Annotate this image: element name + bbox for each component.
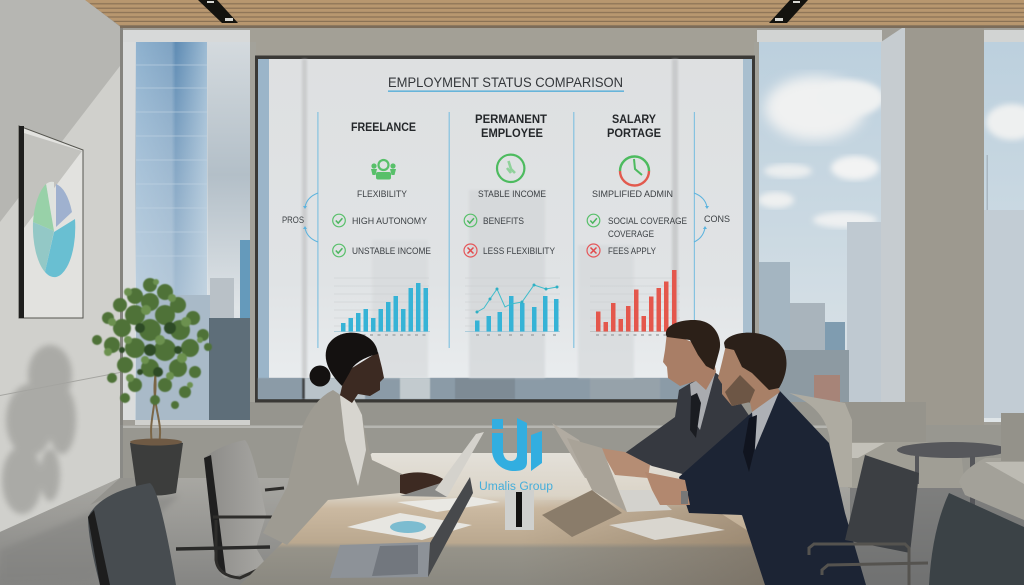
person: middle man	[600, 320, 750, 478]
foliage	[92, 278, 212, 409]
side table	[897, 442, 1007, 516]
sofa back	[848, 402, 926, 444]
bar chart: freelance	[334, 278, 430, 335]
document with pie chart	[347, 513, 472, 540]
wall around the screen	[250, 28, 757, 58]
icon: simplified admin clock	[620, 156, 649, 186]
hair	[724, 333, 787, 390]
logo mark	[492, 418, 542, 471]
face	[718, 345, 780, 412]
ceiling	[85, 0, 1024, 28]
right sofa	[959, 458, 1024, 520]
lower wall band	[90, 402, 1024, 520]
item: social coverage	[587, 214, 687, 239]
pros label with arrows	[282, 193, 318, 242]
right window view	[757, 42, 884, 422]
back chair	[204, 440, 290, 578]
heading: salary portage: SALARY	[612, 112, 656, 126]
right pillar	[881, 26, 984, 428]
shirt and tie	[752, 390, 780, 450]
screen lower city	[258, 378, 752, 399]
left wall	[0, 0, 135, 532]
sofa arm	[789, 393, 852, 487]
hair	[666, 320, 720, 370]
item: fees apply	[587, 244, 656, 257]
jacket	[625, 370, 750, 476]
middle chair	[809, 455, 919, 585]
person: front man	[645, 333, 866, 585]
front laptop keyboard	[619, 490, 672, 512]
label: stable income: STABLE INCOME	[478, 189, 546, 199]
beard shade	[725, 375, 755, 406]
item: high autonomy: HIGH AUTONOMY	[352, 216, 427, 226]
lounge furniture	[789, 393, 1024, 520]
upper window reveal	[123, 30, 1024, 42]
potted plant	[92, 278, 212, 496]
floor	[0, 478, 1024, 585]
hands	[645, 472, 690, 505]
table shadow	[542, 490, 622, 537]
document behind	[397, 497, 500, 512]
right chairs	[809, 455, 1024, 585]
item: unstable income: UNSTABLE INCOME	[352, 246, 431, 256]
combo chart: permanent employee	[465, 278, 560, 335]
cons label with arrows: CONS	[704, 214, 730, 224]
icon: flexibility	[371, 160, 396, 180]
item: social coverage: SOCIAL COVERAGE	[608, 216, 687, 226]
plant pot	[130, 438, 183, 496]
jacket	[263, 390, 402, 545]
cons label with arrows	[694, 193, 730, 242]
screen surface	[269, 59, 743, 378]
column dividers	[317, 112, 695, 348]
item: benefits: BENEFITS	[483, 216, 524, 226]
jacket	[679, 390, 866, 585]
blouse	[340, 395, 366, 486]
sofa seat	[848, 442, 965, 488]
plant shadow on the wall	[2, 345, 76, 514]
label: simplified admin: SIMPLIFIED ADMIN	[592, 189, 673, 199]
item: high autonomy	[333, 214, 427, 227]
forearms and hands	[400, 472, 445, 495]
front laptop lid	[567, 438, 627, 512]
conference table	[240, 453, 832, 585]
column: salary portage: PORTAGE	[607, 126, 661, 140]
heading: permanent employee: PERMANENT	[475, 112, 548, 126]
left chairs	[88, 440, 290, 585]
pros label with arrows: PROS	[282, 215, 304, 225]
screen frame	[255, 56, 755, 402]
logo: Umalis Group	[479, 418, 553, 493]
far right window view	[984, 42, 1024, 422]
item: less flexibility	[464, 244, 555, 257]
left window view	[135, 42, 253, 422]
glass tower	[136, 42, 207, 295]
column: permanent employee	[464, 112, 560, 335]
screen title: EMPLOYMENT STATUS COMPARISON	[388, 74, 623, 90]
item: less flexibility: LESS FLEXIBILITY	[483, 246, 555, 256]
wall artwork: pie chart	[19, 126, 83, 318]
table cable box	[505, 490, 534, 530]
laptops and papers left	[330, 432, 500, 578]
heading: freelance: FREELANCE	[351, 120, 416, 134]
screen left and right strips	[258, 59, 269, 379]
hands	[600, 448, 650, 478]
ceiling light left	[198, 0, 238, 23]
label: flexibility: FLEXIBILITY	[357, 189, 407, 199]
logo wordmark: Umalis Group	[479, 481, 553, 493]
ceiling light right	[769, 0, 808, 23]
shirt and tie	[690, 370, 716, 430]
item: unstable income	[333, 244, 431, 257]
bar chart: salary portage	[590, 270, 680, 335]
column: permanent employee: EMPLOYEE	[481, 126, 543, 140]
item: social coverage: COVERAGE	[608, 229, 654, 239]
neck and face	[340, 352, 384, 403]
item: benefits	[464, 214, 524, 227]
presentation screen	[255, 56, 755, 402]
rear laptop	[552, 423, 600, 478]
front laptop	[330, 477, 473, 578]
face	[663, 332, 716, 390]
front chair	[88, 483, 270, 585]
pie chart slices	[33, 182, 75, 277]
rear and front laptops on right	[552, 423, 672, 512]
end chair	[822, 493, 1024, 585]
icon: stable income	[497, 155, 524, 182]
column: freelance	[333, 120, 431, 335]
woman laptop	[400, 432, 484, 497]
column: salary portage	[587, 112, 687, 335]
item: fees apply: FEES APPLY	[608, 246, 656, 256]
hair	[326, 333, 378, 386]
person: woman	[263, 333, 445, 545]
paper on right of table	[609, 517, 725, 540]
